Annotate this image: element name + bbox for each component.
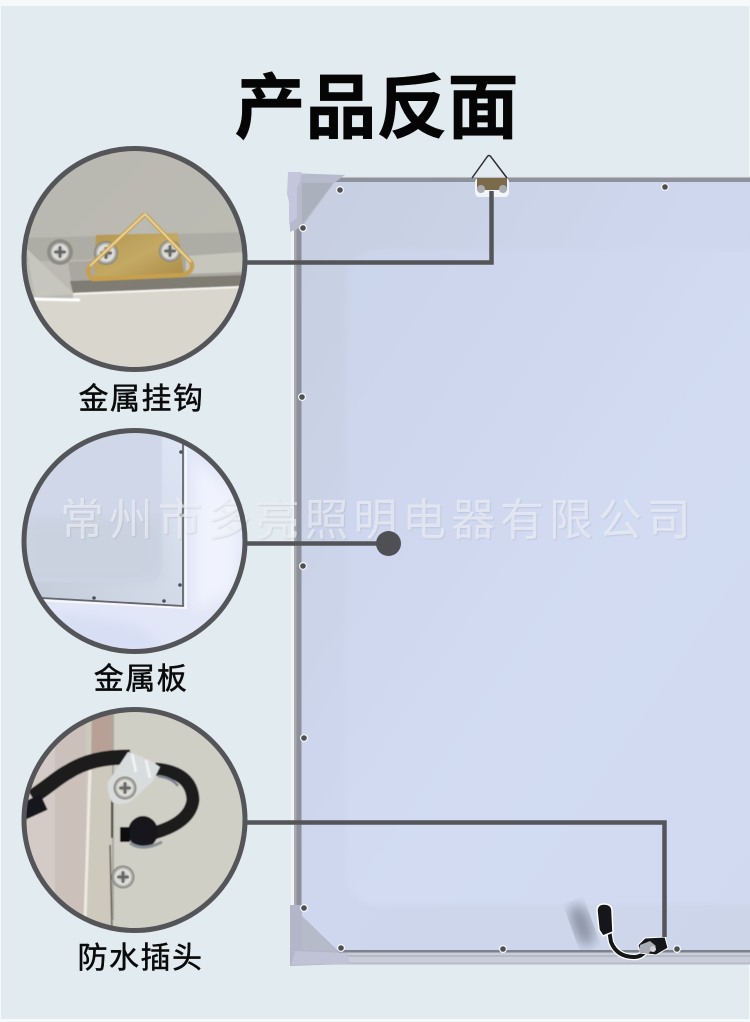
rail [68,256,242,281]
title: 产品反面 [234,70,519,148]
circle photo: waterproof plug [26,712,242,928]
lower panel [35,288,238,367]
brass triangle hook [88,214,192,279]
backdrop [20,425,250,657]
left wall [20,705,88,937]
callout line: plate with dot [247,531,401,556]
frame left [291,225,294,910]
inner raised area [346,250,750,905]
panel face [35,473,182,605]
corner bracket bottom left [290,905,350,966]
black cable left [32,757,130,797]
edge screws [298,183,681,953]
screws [47,239,181,265]
frame top [335,178,750,182]
frame strips [86,772,88,792]
wall surface [26,151,239,299]
label: metal hook: 金属挂钩 [78,383,204,416]
grommet [128,816,158,848]
panel: LED panel back [287,156,750,966]
panel wall [112,712,242,928]
circle rings [24,148,245,930]
label: waterproof plug: 防水插头 [78,942,204,975]
plate screws [92,450,183,603]
screws [112,776,136,888]
callout line: plug [247,822,664,937]
darker band above rail [20,232,245,262]
callout line: hook [247,191,492,262]
brass plate [94,233,184,280]
corner bracket top left [288,173,345,232]
small plug on panel [597,904,668,957]
label: metal plate: 金属板 [94,663,188,696]
frame bottom [335,950,750,952]
black cable loop [146,769,193,835]
plastic clip [108,752,160,804]
circle photo: metal plate [26,433,242,649]
panel edge [42,440,183,606]
back plate [300,181,750,952]
watermark: 常州市多亮照明电器有限公司 [60,496,696,545]
small hook on panel [472,156,509,197]
corner plate [26,248,74,297]
circle photo: metal hook [26,151,242,367]
plug shadow [566,901,598,949]
